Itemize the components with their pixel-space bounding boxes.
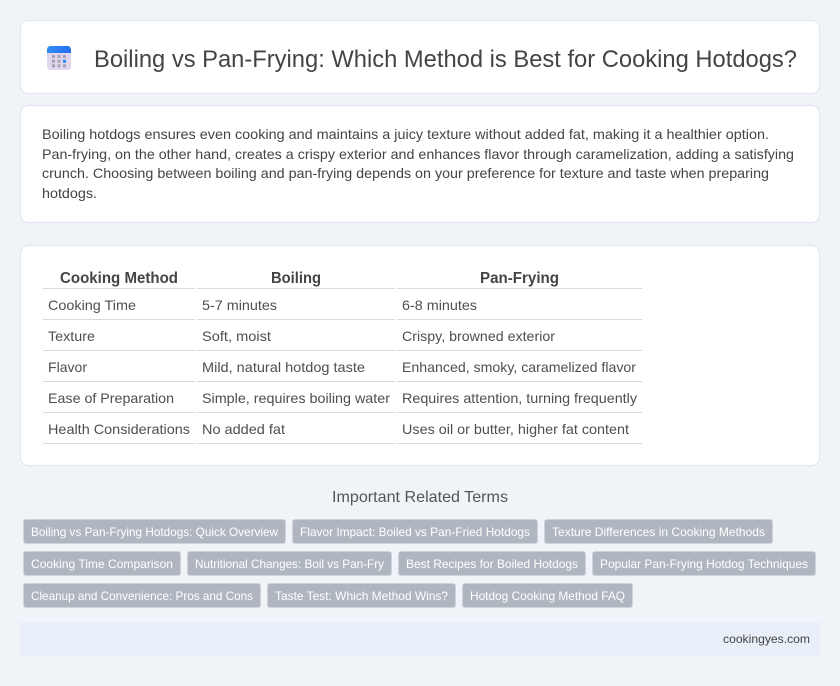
tag: Popular Pan-Frying Hotdog Techniques [600,557,808,571]
row: texture: Texture [48,328,95,344]
row: flavor [48,359,636,375]
tag [24,552,180,576]
tag [188,552,392,576]
title: Boiling vs Pan-Frying: Which Method is Best for Cooking Hotdogs? [94,46,797,73]
row: cooking time: 5-7 minutes [202,297,277,313]
table header row: Pan-Frying [480,270,559,287]
tag [462,584,632,608]
tag [544,520,772,544]
row: texture: Crispy, browned exterior [402,328,555,344]
row: ease of preparation: Ease of Preparation [48,390,174,406]
tag [24,520,286,544]
panel: introduction text [20,106,820,222]
footer source text: cookingyes.com [723,632,810,646]
row: ease of preparation [48,390,637,406]
row: texture [48,328,555,344]
tag: Hotdog Cooking Method FAQ [470,589,625,603]
row: health considerations: Uses oil or butter, higher fat content [402,421,629,437]
row: texture: Soft, moist [202,328,271,344]
tag [268,584,456,608]
intro paragraph: crunch. Choosing between boiling and pan-frying depends on your preference for texture and taste when preparing [42,165,769,181]
tag: Nutritional Changes: Boil vs Pan-Fry [195,557,384,571]
row: cooking time [48,297,477,313]
row: flavor: Mild, natural hotdog taste [202,359,365,375]
tag: Best Recipes for Boiled Hotdogs [406,557,578,571]
table header row: Cooking Method [60,270,178,287]
table header row [60,270,559,287]
tag: Cleanup and Convenience: Pros and Cons [31,589,253,603]
footer [20,622,820,656]
table header row: Boiling [271,270,321,287]
row: health considerations: Health Considerations [48,421,190,437]
row: cooking time: 6-8 minutes [402,297,477,313]
icon: calendar [47,46,71,70]
intro paragraph: Boiling hotdogs ensures even cooking and maintains a juicy texture without added fat, making it a healthier option. [42,126,769,142]
tag [592,552,816,576]
row: flavor: Flavor [48,359,87,375]
tag [398,552,586,576]
tag [24,584,260,608]
tag: Cooking Time Comparison [31,557,173,571]
row: cooking time: Cooking Time [48,297,136,313]
row: ease of preparation: Simple, requires boiling water [202,390,390,406]
intro paragraph [42,126,794,201]
row: health considerations [48,421,629,437]
intro paragraph: Pan-frying, on the other hand, creates a crispy exterior and enhances flavor through caramelization, adding a satisfying [42,146,794,162]
row: flavor: Enhanced, smoky, caramelized flavor [402,359,636,375]
tag [292,520,538,544]
intro paragraph: hotdogs. [42,185,97,201]
tag: Taste Test: Which Method Wins? [275,589,448,603]
tag: Boiling vs Pan-Frying Hotdogs: Quick Overview [31,525,278,539]
tag: Flavor Impact: Boiled vs Pan-Fried Hotdogs [300,525,530,539]
row: health considerations: No added fat [202,421,285,437]
panel: comparison table [20,246,820,466]
row: ease of preparation: Requires attention, turning frequently [402,390,637,406]
heading: important related terms: Important Related Terms [332,489,508,506]
tag: Texture Differences in Cooking Methods [552,525,765,539]
related term tags [24,520,816,608]
panel: title header [20,20,820,94]
